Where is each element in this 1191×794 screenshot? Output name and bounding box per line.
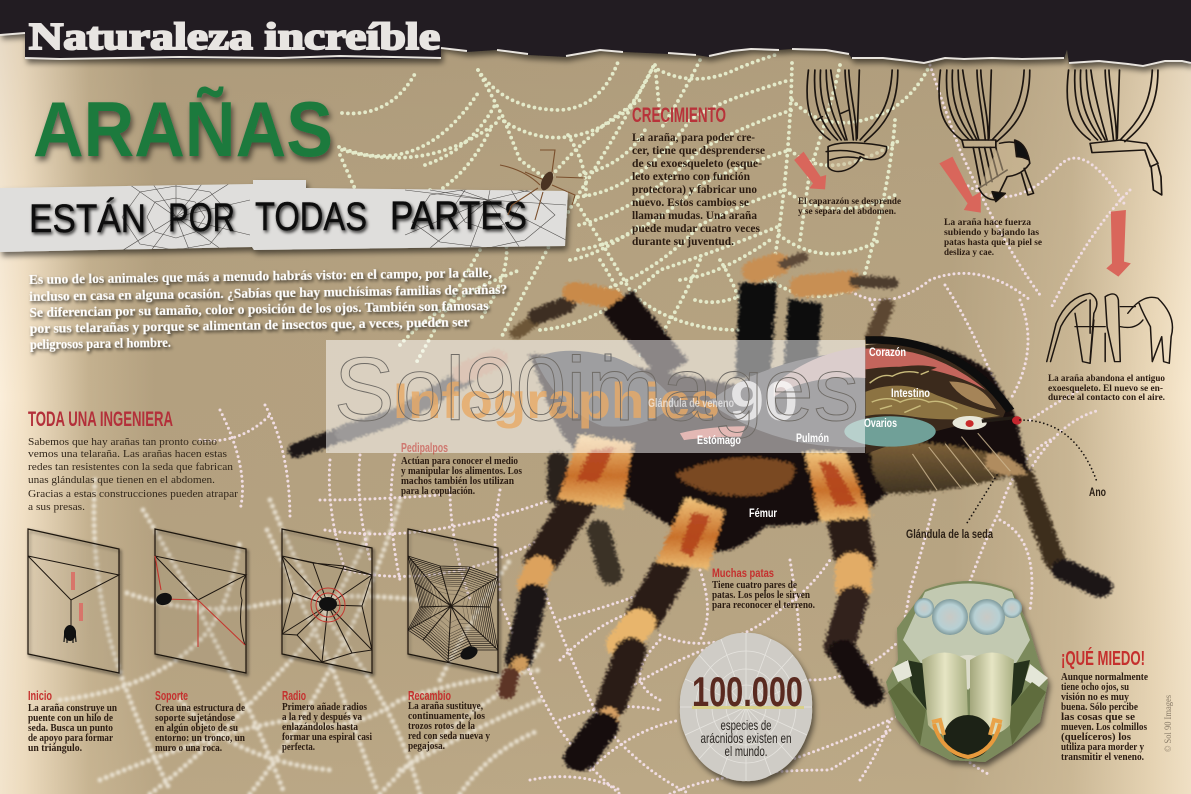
caption: paso 1 [798, 197, 901, 217]
label: ovarios: Ovarios [864, 416, 897, 430]
banner words: PARTES [390, 194, 527, 238]
label: corazón: Corazón [869, 345, 906, 359]
label: intestino: Intestino [891, 386, 930, 400]
intro text: Se diferencian por su tamaño, color o posición de los ojos. También son famosas [29, 299, 489, 321]
label: glándula: Glándula de veneno [648, 396, 734, 410]
intro text: Es uno de los animales que más a menudo habrás visto: en el campo, por la calle, [29, 266, 492, 288]
panel: qué miedo [1061, 647, 1149, 763]
caption: paso 1: y se separa del abdomen. [798, 207, 896, 217]
label: estómago: Estómago [697, 433, 741, 447]
callout: muchas patas: para reconocer el terreno. [712, 600, 815, 611]
label: ano: Ano [1089, 485, 1106, 499]
copyright: © Sol 90 Images [1163, 695, 1174, 752]
arrow 2 [939, 157, 981, 213]
banner strip [0, 180, 568, 252]
abdomen cross section [844, 340, 1022, 490]
fangs [934, 724, 1000, 757]
body text: a sus presas. [28, 501, 85, 513]
body text: utiliza para morder y [1061, 742, 1144, 753]
step text: radio [282, 688, 372, 753]
body text: Sabemos que hay arañas tan pronto como [28, 436, 218, 448]
body text: durante su juventud. [632, 236, 734, 248]
body text: cer, tiene que desprenderse [632, 145, 765, 157]
tarantula illustration [296, 257, 1100, 758]
label: pulmón: Pulmón [796, 431, 829, 445]
caption: paso 3: La araña abandona el antiguo [1048, 374, 1165, 384]
step text: recambio: red con seda nueva y [408, 731, 490, 742]
panel: toda una ingeniera [28, 408, 238, 513]
title: Arañas: ARAÑAS [33, 85, 333, 173]
moult stage 4 [1047, 293, 1172, 363]
watermark orange word: Infographics [393, 373, 720, 429]
chelicerae [922, 652, 968, 734]
moult stage 1 [807, 70, 898, 171]
badge text: el mundo. [724, 743, 768, 759]
watermark [326, 340, 865, 453]
title: Naturaleza increíble: Naturaleza increíble [29, 16, 440, 58]
panel: crecimiento [632, 104, 765, 248]
caption: paso 3: durece al contacto con el aire. [1048, 393, 1165, 403]
step diagram: inicio [28, 529, 119, 673]
body text: La araña, para poder cre- [632, 132, 755, 144]
leader: ano [1020, 420, 1097, 482]
eyes [914, 598, 934, 618]
step text: recambio: pegajosa. [408, 741, 445, 752]
step text: inicio: puente con un hilo de [28, 713, 114, 724]
body text: de su exoesqueleto (esque- [632, 158, 762, 170]
caption: paso 2: desliza y cae. [944, 248, 994, 258]
step text: radio: a la red y después va [282, 712, 362, 723]
caption: paso 1: El caparazón se desprende [798, 197, 901, 207]
step text: soporte: Crea una estructura de [155, 703, 245, 714]
header torn black band [0, 0, 1191, 67]
badge: 100.000 especies [680, 633, 812, 781]
step text: inicio: Inicio [28, 688, 52, 703]
body text: mueven. Los colmillos [1061, 722, 1147, 733]
body text [1061, 672, 1149, 763]
heading: TODA UNA INGENIERA [28, 408, 173, 431]
step text: soporte: muro o una roca. [155, 743, 222, 754]
step text: soporte: en algún objeto de su [155, 723, 238, 734]
body text: vemos una telaraña. Las arañas hacen estas [28, 448, 227, 460]
body text: transmitir el veneno. [1061, 752, 1144, 763]
body text [28, 436, 238, 513]
dew spider web: pink right and lower strands [200, 65, 1130, 794]
caption: paso 3: exoesqueleto. El nuevo se en- [1048, 384, 1163, 394]
step text: inicio: seda. Busca un punto [28, 723, 113, 734]
body text: (quelíceros) los [1061, 732, 1131, 743]
step text: inicio: La araña construye un [28, 703, 117, 714]
step text: inicio: un triángulo. [28, 743, 82, 754]
dew spider web: blurred lower strands [60, 480, 545, 794]
step text: radio: formar una espiral casi [282, 732, 372, 743]
arrow 3 [1106, 210, 1131, 277]
caption: paso 2: subiendo y bajando las [944, 228, 1039, 238]
step text: radio: enlazándolos hasta [282, 722, 358, 733]
step text: radio: perfecta. [282, 742, 315, 753]
step text: recambio: La araña sustituye, [408, 701, 483, 712]
leader: glándula de la seda [967, 475, 997, 523]
banner words: POR [168, 196, 235, 240]
callout: pedipalpos: machos también los utilizan [401, 476, 514, 487]
tarantula fur mass [296, 257, 1100, 758]
badge web lines [680, 633, 812, 781]
badge underline [692, 706, 804, 709]
step text: radio: Primero añade radios [282, 702, 367, 713]
banner words: ESTÁN [29, 196, 146, 241]
body text: llaman mudas. Una araña [632, 210, 757, 222]
body text: visión no es muy [1061, 692, 1129, 703]
step text: recambio: continuamente, los [408, 711, 485, 722]
moult stage 2 [939, 70, 1034, 202]
label: fémur: Fémur [749, 506, 777, 520]
callout: muchas patas: patas. Los pelos le sirven [712, 590, 810, 601]
badge text: especies de [720, 717, 772, 733]
step diagram: radio [282, 529, 372, 673]
callout: pedipalpos: para la copulación. [401, 486, 475, 497]
step text: soporte: soporte sujetándose [155, 713, 236, 724]
arrow 1 [794, 152, 826, 189]
spider head [886, 581, 1048, 762]
intro text [29, 266, 508, 353]
anatomy labels [648, 345, 1106, 541]
body text: las cosas que se [1061, 712, 1136, 723]
body text: protectora) y fabricar uno [632, 184, 757, 196]
carapace cutaway [535, 347, 866, 447]
body text: tiene ocho ojos, su [1061, 682, 1129, 693]
banner words: TODAS [255, 195, 367, 239]
body text: buena. Sólo percibe [1061, 702, 1139, 713]
step text: inicio [28, 688, 117, 754]
moult stage 3 [1067, 70, 1162, 195]
heading: ¡QUÉ MIEDO! [1061, 647, 1145, 670]
body text: Gracias a estas construcciones pueden atrapar [28, 488, 238, 500]
intro text: incluso en casa en alguna ocasión. ¿Sabías que hay muchísimas familias de arañas? [29, 283, 507, 305]
banner: están por todas partes [0, 180, 568, 252]
callout: muchas patas [712, 566, 815, 611]
label: glándula de la seda: Glándula de la seda [906, 527, 993, 541]
step diagram: recambio [408, 529, 498, 673]
step text: soporte [155, 688, 245, 754]
watermark icon [605, 354, 611, 361]
watermark outline word: Sol90images [334, 340, 859, 440]
step text: soporte: Soporte [155, 688, 188, 703]
body text: unas glándulas que tienen en el abdomen. [28, 474, 215, 486]
step text: radio: Radio [282, 688, 306, 703]
body text [632, 132, 765, 248]
body text: puede mudar cuatro veces [632, 223, 761, 235]
callout: muchas patas: Tiene cuatro pares de [712, 580, 798, 591]
step text: soporte: entorno: un tronco, un [155, 733, 245, 744]
step text: recambio: Recambio [408, 688, 451, 703]
jumping spider portrait [886, 581, 1048, 762]
step diagram: soporte [155, 529, 246, 673]
heading: CRECIMIENTO [632, 104, 726, 127]
badge text [700, 717, 792, 759]
body text: leto externo con función [632, 171, 751, 183]
small house spider [500, 150, 585, 220]
badge number: 100.000 [692, 668, 803, 715]
step text: recambio [408, 688, 490, 752]
callout: pedipalpos: Pedipalpos [401, 440, 448, 455]
body text: Aunque normalmente [1061, 672, 1149, 683]
intro text: peligrosos para el hombre. [30, 336, 171, 353]
caption: paso 2 [944, 218, 1042, 258]
caption: paso 2: La araña hace fuerza [944, 218, 1031, 228]
callout: muchas patas: Muchas patas [712, 566, 774, 580]
callout: pedipalpos [401, 440, 522, 497]
caption: paso 3 [1048, 374, 1165, 403]
callout: pedipalpos: y manipular los alimentos. Los [401, 466, 522, 477]
callout: pedipalpos: Actúan para conocer el medio [401, 456, 518, 467]
badge text: arácnidos existen en [700, 730, 792, 746]
step text: recambio: trozos rotos de la [408, 721, 475, 732]
body text: redes tan resistentes con la seda que fabrican [28, 461, 234, 473]
body text: nuevo. Estos cambios se [632, 197, 749, 209]
caption: paso 2: patas hasta que la piel se [944, 238, 1042, 248]
watermark white number: 90 [730, 369, 798, 432]
step text: inicio: de apoyo para formar [28, 733, 114, 744]
moult diagrams [794, 70, 1172, 363]
banner words [29, 194, 527, 241]
banner web drawings [120, 180, 566, 252]
badge shape [680, 633, 812, 781]
dew spider web: green upper strands [339, 55, 930, 365]
intro text: por sus telarañas y porque se alimentan de insectos que, a veces, pueden ser [30, 315, 470, 337]
